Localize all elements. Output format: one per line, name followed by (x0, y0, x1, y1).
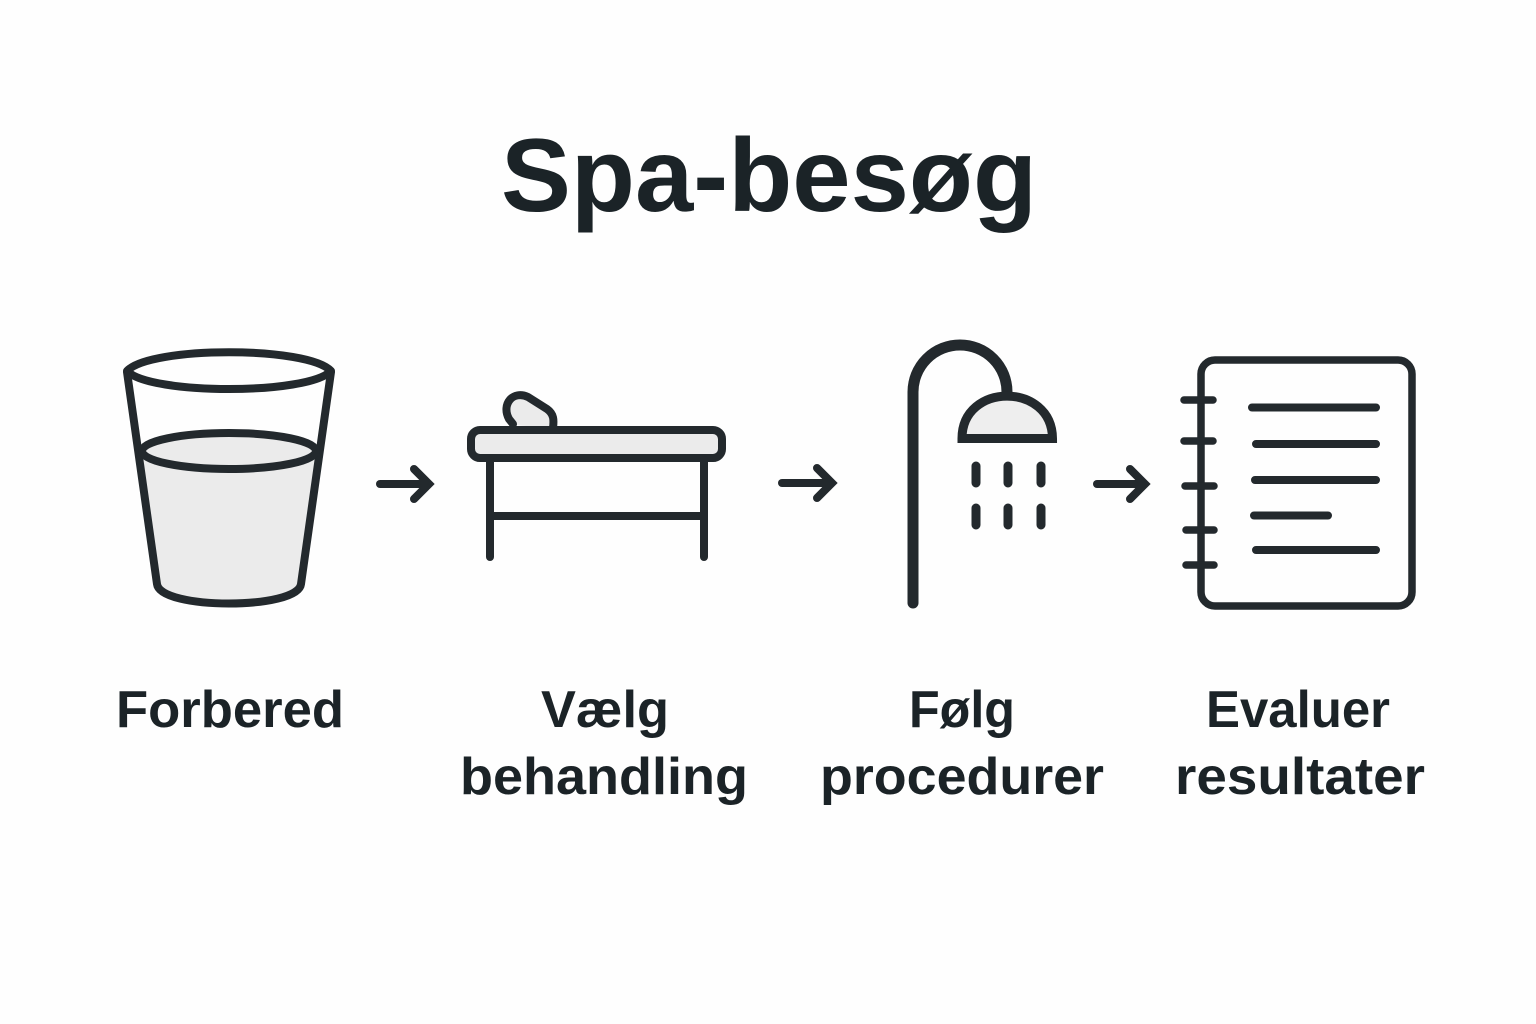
icon: notebook (1184, 360, 1412, 606)
label: Følg procedurer: procedurer (820, 748, 1104, 806)
label: Vælg behandling: behandling (460, 748, 748, 806)
icon: glass of water (127, 352, 331, 604)
arrow 3 (1097, 469, 1145, 499)
arrow 1 (380, 469, 429, 499)
label: Evaluer resultater (1175, 681, 1425, 806)
label: Forbered: Forbered (116, 681, 344, 739)
arrow 2 (782, 468, 832, 498)
icon: massage table (471, 395, 722, 557)
label: Følg procedurer: Følg (909, 681, 1015, 739)
label: Vælg behandling: Vælg (541, 681, 669, 739)
label: Vælg behandling (460, 681, 748, 806)
label: Evaluer resultater: resultater (1175, 748, 1425, 806)
label: Evaluer resultater: Evaluer (1206, 681, 1390, 739)
label: Følg procedurer (820, 681, 1104, 806)
icon: shower (913, 345, 1052, 603)
title: Spa-besøg (501, 118, 1037, 234)
